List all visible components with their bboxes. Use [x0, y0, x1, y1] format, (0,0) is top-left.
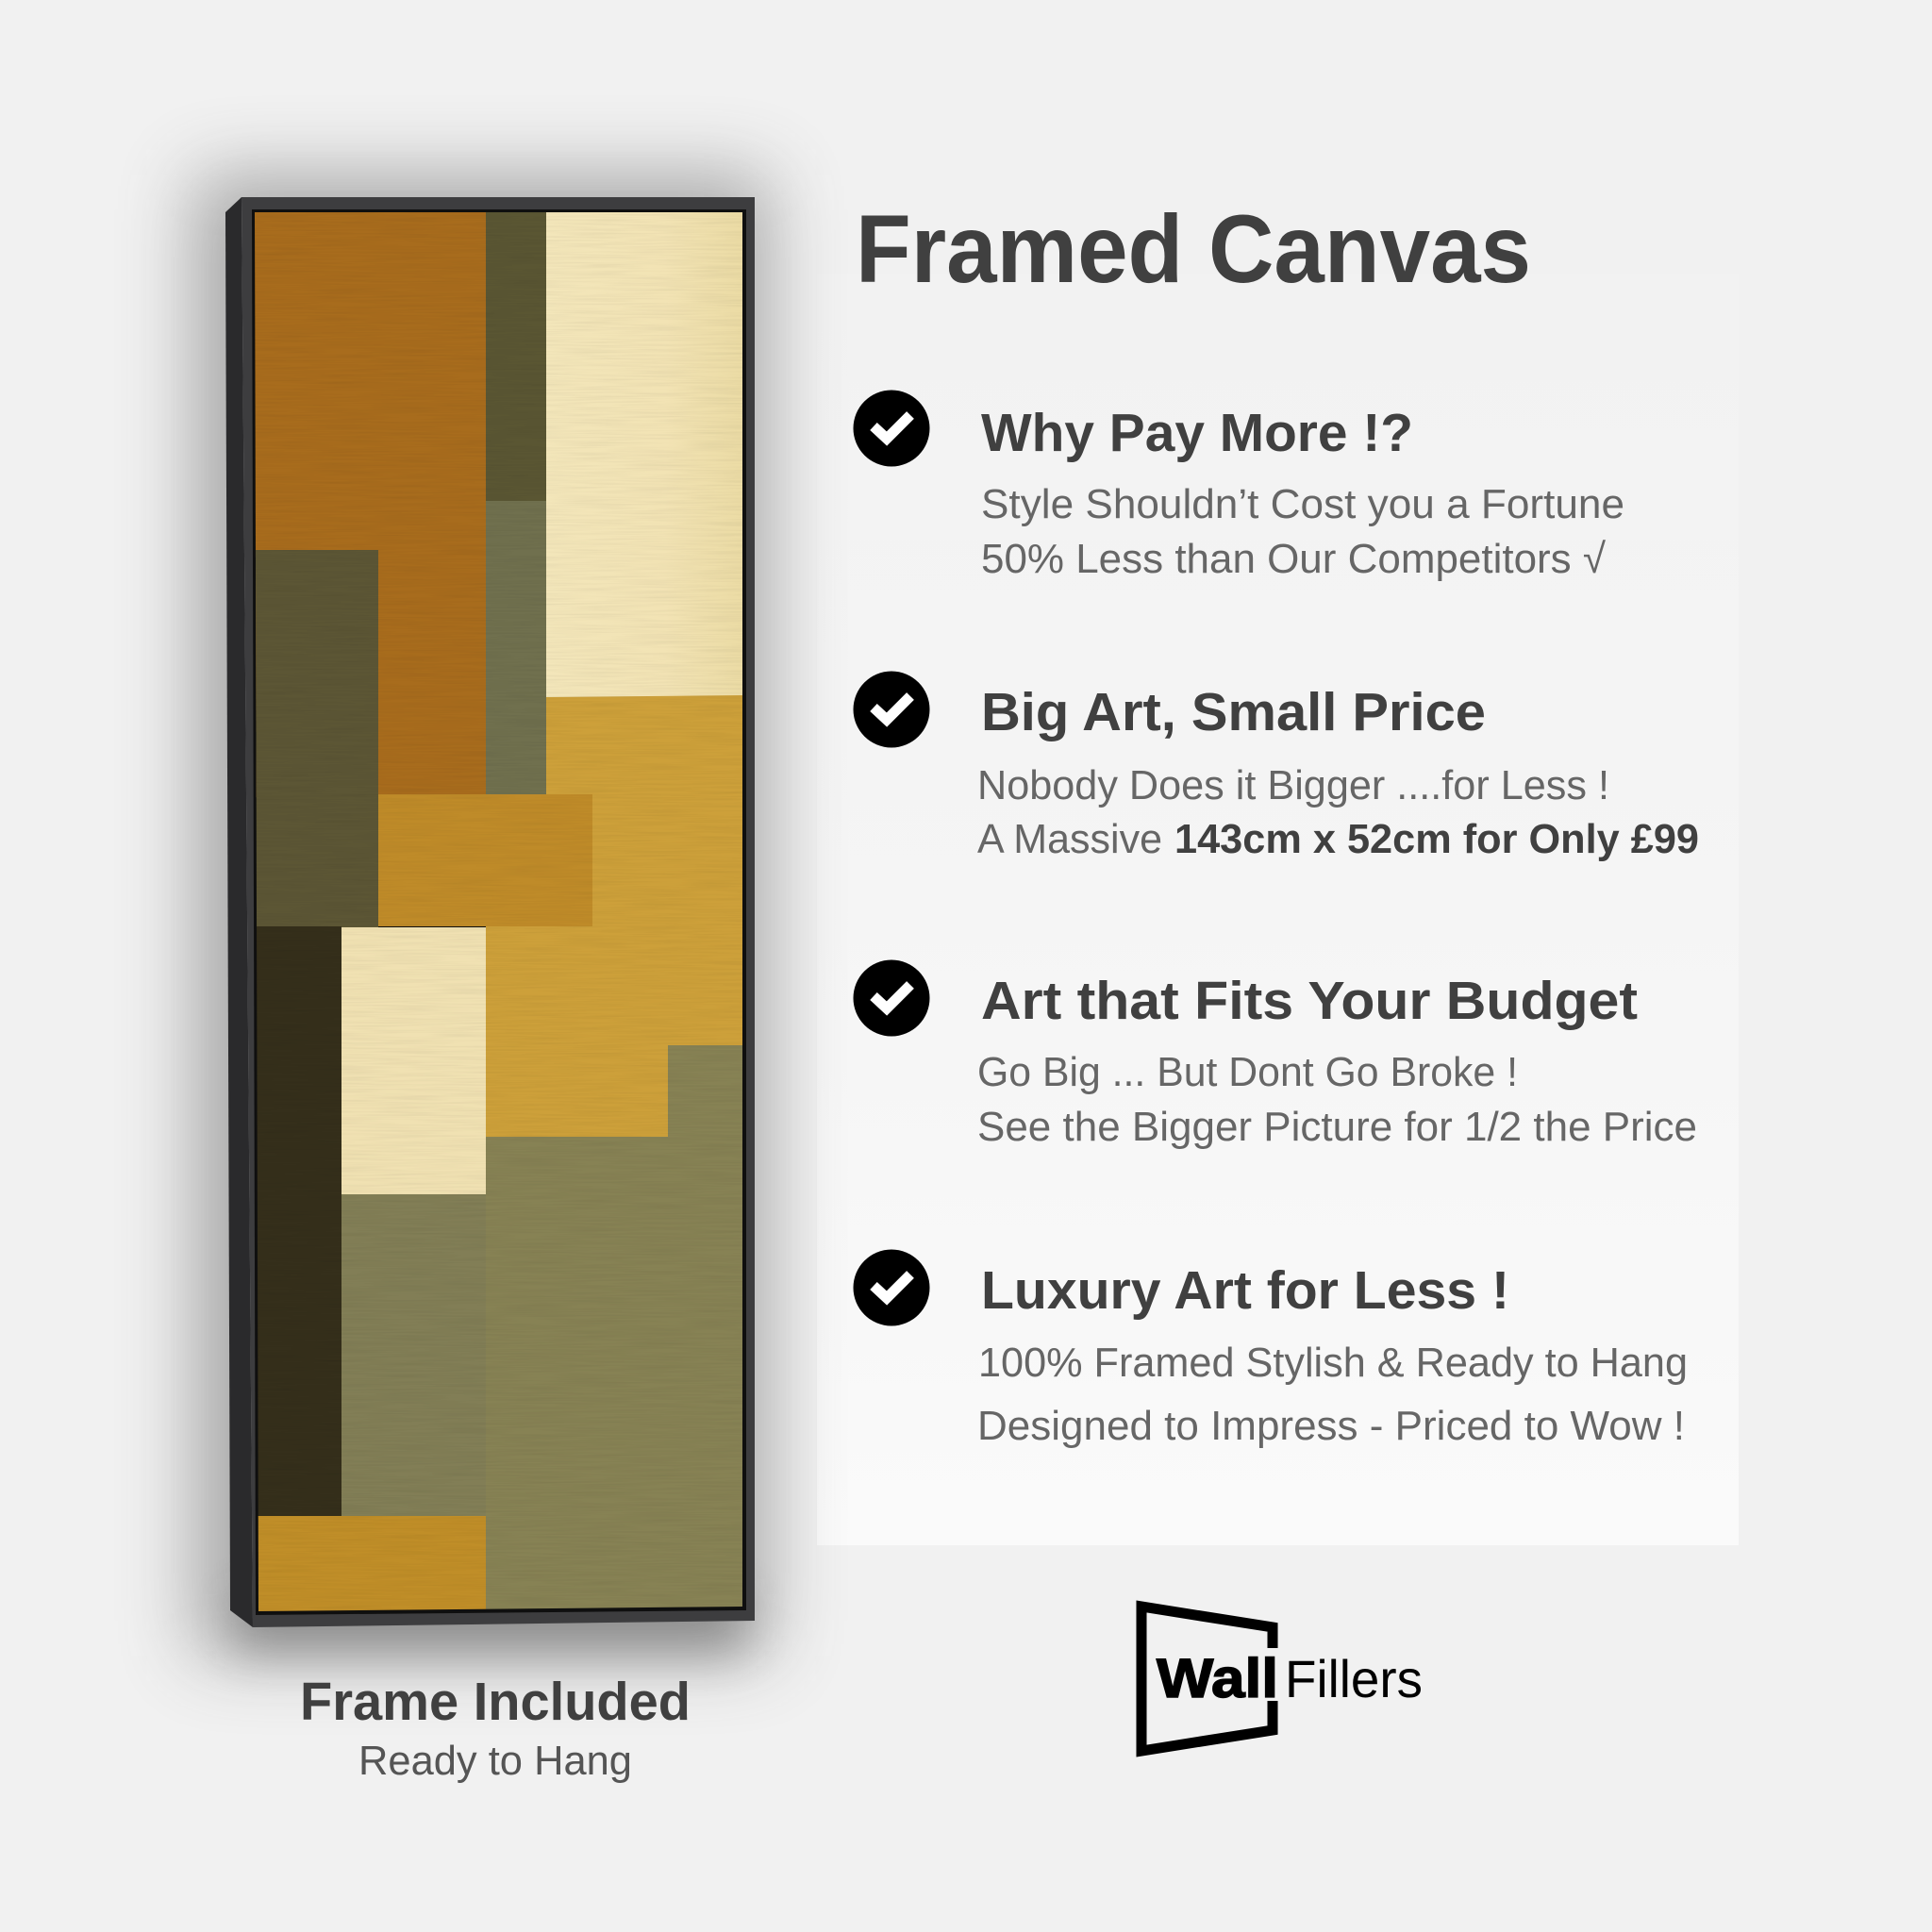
block: dark olive strip	[486, 212, 546, 502]
body text	[981, 481, 1624, 582]
block: amber bottom	[253, 1516, 486, 1615]
feature: why pay more	[853, 391, 1624, 582]
caption: frame included: Ready to Hang	[358, 1738, 632, 1784]
feature: art that fits your budget	[853, 960, 1697, 1150]
logo wordmark	[1157, 1648, 1423, 1709]
feature: big art small price	[853, 672, 1699, 862]
caption: frame included	[300, 1672, 691, 1784]
body text: Nobody Does it Bigger ....for Less !	[977, 762, 1609, 808]
body text: A Massive	[977, 816, 1162, 862]
heading: Art that Fits Your Budget	[981, 971, 1638, 1031]
body text: Designed to Impress - Priced to Wow !	[977, 1403, 1685, 1449]
icon: check	[853, 672, 930, 747]
body text	[977, 1049, 1697, 1150]
framed canvas artwork	[225, 197, 755, 1627]
block: cream top right	[546, 212, 744, 698]
block: darkest column	[253, 926, 341, 1517]
block: brown	[253, 212, 486, 797]
shadow behind framed canvas	[193, 175, 769, 1656]
canvas painting	[253, 212, 744, 1615]
logo wordmark: Wall	[1157, 1648, 1278, 1709]
logo: WallFillers	[1141, 1607, 1423, 1751]
icon: check	[853, 391, 930, 466]
heading: Why Pay More !?	[981, 403, 1413, 463]
logo wordmark: Fillers	[1285, 1649, 1423, 1708]
body text: Style Shouldn’t Cost you a Fortune	[981, 481, 1624, 527]
body text: 50% Less than Our Competitors √	[981, 536, 1607, 582]
block: dark olive left	[253, 550, 378, 927]
feature: luxury art for less	[853, 1249, 1688, 1449]
title: Framed Canvas	[856, 195, 1531, 303]
frame: inner edge	[252, 209, 746, 1615]
block: amber bar	[378, 794, 592, 926]
block: olive large	[486, 1045, 744, 1613]
body text	[977, 762, 1699, 862]
block: grey olive strip	[486, 501, 546, 795]
frame: front face	[242, 197, 755, 1627]
body text: 100% Framed Stylish & Ready to Hang	[978, 1340, 1688, 1386]
frame: left side	[225, 197, 253, 1627]
heading: Luxury Art for Less !	[981, 1260, 1509, 1321]
caption: frame included: Frame Included	[300, 1672, 691, 1732]
block: olive lower	[341, 1194, 486, 1517]
body text: 143cm x 52cm for Only £99	[1174, 816, 1699, 862]
body text	[977, 1340, 1688, 1449]
panel: text backdrop	[817, 274, 1739, 1545]
heading: Big Art, Small Price	[981, 682, 1486, 742]
body text: See the Bigger Picture for 1/2 the Price	[977, 1104, 1697, 1150]
block: mustard	[486, 695, 744, 1137]
icon: check	[853, 1249, 930, 1326]
body text: Go Big ... But Dont Go Broke !	[977, 1049, 1518, 1095]
block: cream lower	[341, 927, 486, 1194]
icon: check	[853, 960, 930, 1036]
logo frame	[1141, 1607, 1273, 1751]
